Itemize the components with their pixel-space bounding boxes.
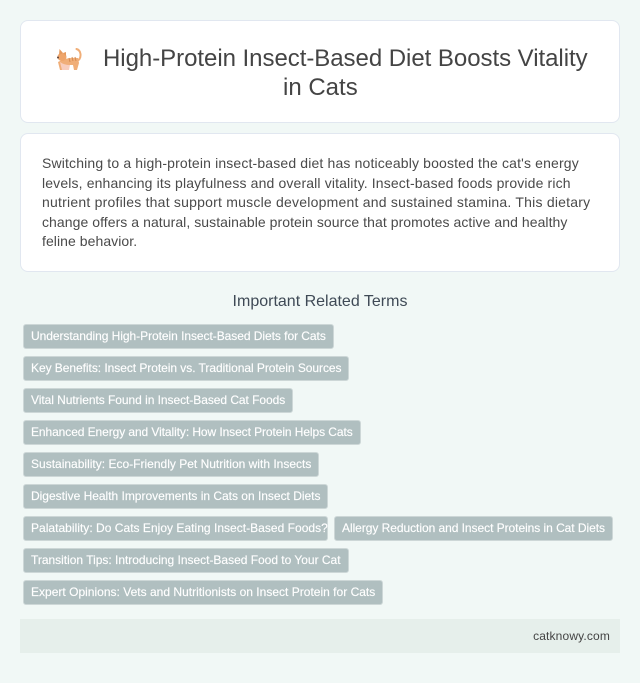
tag 5: Sustainability: Eco-Friendly Pet Nutrition with Insects [31,457,311,471]
title card [20,20,620,123]
tag 5 [23,452,319,477]
tag 10: Expert Opinions: Vets and Nutritionists on Insect Protein for Cats [31,585,375,599]
tag 1: Understanding High-Protein Insect-Based Diets for Cats [31,329,326,343]
summary text: levels, enhancing its playfulness and overall vitality. Insect-based foods provide rich [42,175,571,191]
title: in Cats [283,74,358,101]
summary text [42,155,590,249]
summary text: Switching to a high-protein insect-based diet has noticeably boosted the cat's energy [42,155,579,171]
heading: related terms: Important Related Terms [233,293,407,310]
tag 9: Transition Tips: Introducing Insect-Based Food to Your Cat [31,553,341,567]
footer source: catknowy.com [533,629,610,643]
summary text: change offers a natural, sustainable protein source that promotes active and healthy [42,214,567,230]
footer bar [20,619,620,653]
icon: cat [57,48,82,70]
title [103,45,588,101]
tag 3 [23,388,293,413]
summary card [20,133,620,272]
tag 3: Vital Nutrients Found in Insect-Based Cat Foods [31,393,285,407]
tag 9 [23,548,349,573]
title: High-Protein Insect-Based Diet Boosts Vitality [103,45,588,72]
summary text: feline behavior. [42,233,137,249]
summary text: nutrient profiles that support muscle development and sustained stamina. This dietary [42,194,590,210]
tag 2: Key Benefits: Insect Protein vs. Traditional Protein Sources [31,361,342,375]
tag 10 [23,580,383,605]
tag 4: Enhanced Energy and Vitality: How Insect Protein Helps Cats [31,425,353,439]
tag 8 [334,516,613,541]
tag 6 [23,484,328,509]
tag 7: Palatability: Do Cats Enjoy Eating Insect-Based Foods? [31,521,328,535]
tag 4 [23,420,361,445]
tag 6: Digestive Health Improvements in Cats on Insect Diets [31,489,320,503]
tag list [23,324,613,605]
tag 1 [23,324,334,349]
tag 8: Allergy Reduction and Insect Proteins in Cat Diets [342,521,605,535]
tag 7 [23,516,328,541]
tag 2 [23,356,349,381]
